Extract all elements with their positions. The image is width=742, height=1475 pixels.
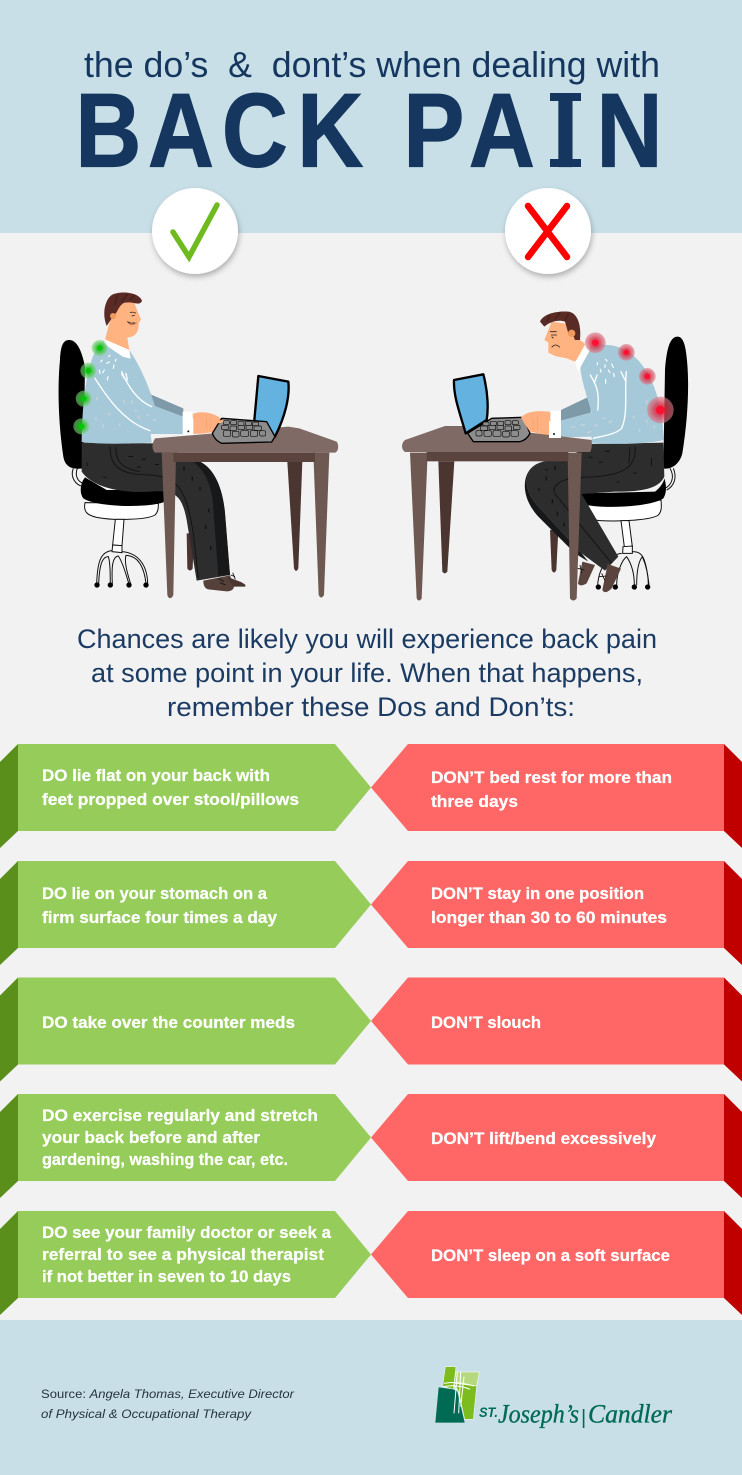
row 2	[0, 861, 742, 965]
don't: bed rest	[371, 744, 742, 848]
row 4	[0, 1094, 742, 1198]
icon: check mark	[152, 188, 238, 274]
do: exercise: your back before and after	[42, 1129, 261, 1147]
don't: bed rest: three days	[431, 793, 518, 811]
do: exercise	[0, 1094, 371, 1198]
do: see doctor: if not better in seven to 10 days	[42, 1268, 291, 1286]
intro text: Chances are likely you will experience back pain	[77, 624, 657, 654]
don't: bed rest: DON’T bed rest for more than	[431, 769, 672, 787]
title: BACK PAIN	[75, 72, 662, 189]
do: lie flat: DO lie flat on your back with	[42, 767, 270, 785]
logo: ST.	[479, 1404, 498, 1420]
do: meds	[0, 978, 371, 1082]
logo	[435, 1367, 673, 1429]
logo: |	[581, 1407, 586, 1429]
do: lie flat	[0, 744, 371, 848]
intro text: remember these Dos and Don’ts:	[167, 692, 575, 722]
source note: Source: Angela Thomas, Executive Director	[41, 1387, 295, 1401]
do: meds: DO take over the counter meds	[42, 1014, 295, 1032]
don't: stay in one position: DON’T stay in one position	[431, 885, 644, 903]
source note	[41, 1387, 295, 1421]
row 5	[0, 1211, 742, 1315]
footer band	[0, 1320, 742, 1475]
do: exercise: DO exercise regularly and stretch	[42, 1107, 318, 1125]
illustration: bad posture	[402, 311, 688, 600]
title: the do’s & dont’s when dealing with	[84, 44, 660, 85]
source note: of Physical & Occupational Therapy	[41, 1407, 252, 1421]
do: lie on stomach: DO lie on your stomach on a	[42, 885, 268, 903]
intro text: at some point in your life. When that happens,	[91, 658, 643, 688]
row 1	[0, 744, 742, 848]
do: lie flat: feet propped over stool/pillows	[42, 791, 299, 809]
intro text	[77, 624, 657, 722]
logo: Joseph’s	[498, 1400, 579, 1428]
don't: slouch	[371, 978, 742, 1082]
illustration: good posture	[59, 293, 338, 598]
do: see doctor: referral to see a physical therapist	[42, 1246, 325, 1264]
don't: soft surface	[371, 1211, 742, 1315]
don't: stay in one position	[371, 861, 742, 965]
do: see doctor: DO see your family doctor or seek a	[42, 1224, 332, 1242]
header band	[0, 0, 742, 233]
logo: Candler	[588, 1400, 673, 1428]
don't: soft surface: DON’T sleep on a soft surface	[431, 1247, 670, 1265]
do: lie on stomach: firm surface four times a day	[42, 909, 278, 927]
row 3	[0, 978, 742, 1082]
do: lie on stomach	[0, 861, 371, 965]
do: exercise: gardening, washing the car, etc.	[42, 1151, 288, 1169]
do: see doctor	[0, 1211, 371, 1315]
don't: slouch: DON’T slouch	[431, 1014, 541, 1032]
don't: lift/bend: DON’T lift/bend excessively	[431, 1130, 657, 1148]
don't: stay in one position: longer than 30 to 60 minutes	[431, 909, 667, 927]
don't: lift/bend	[371, 1094, 742, 1198]
icon: red cross	[505, 188, 591, 274]
